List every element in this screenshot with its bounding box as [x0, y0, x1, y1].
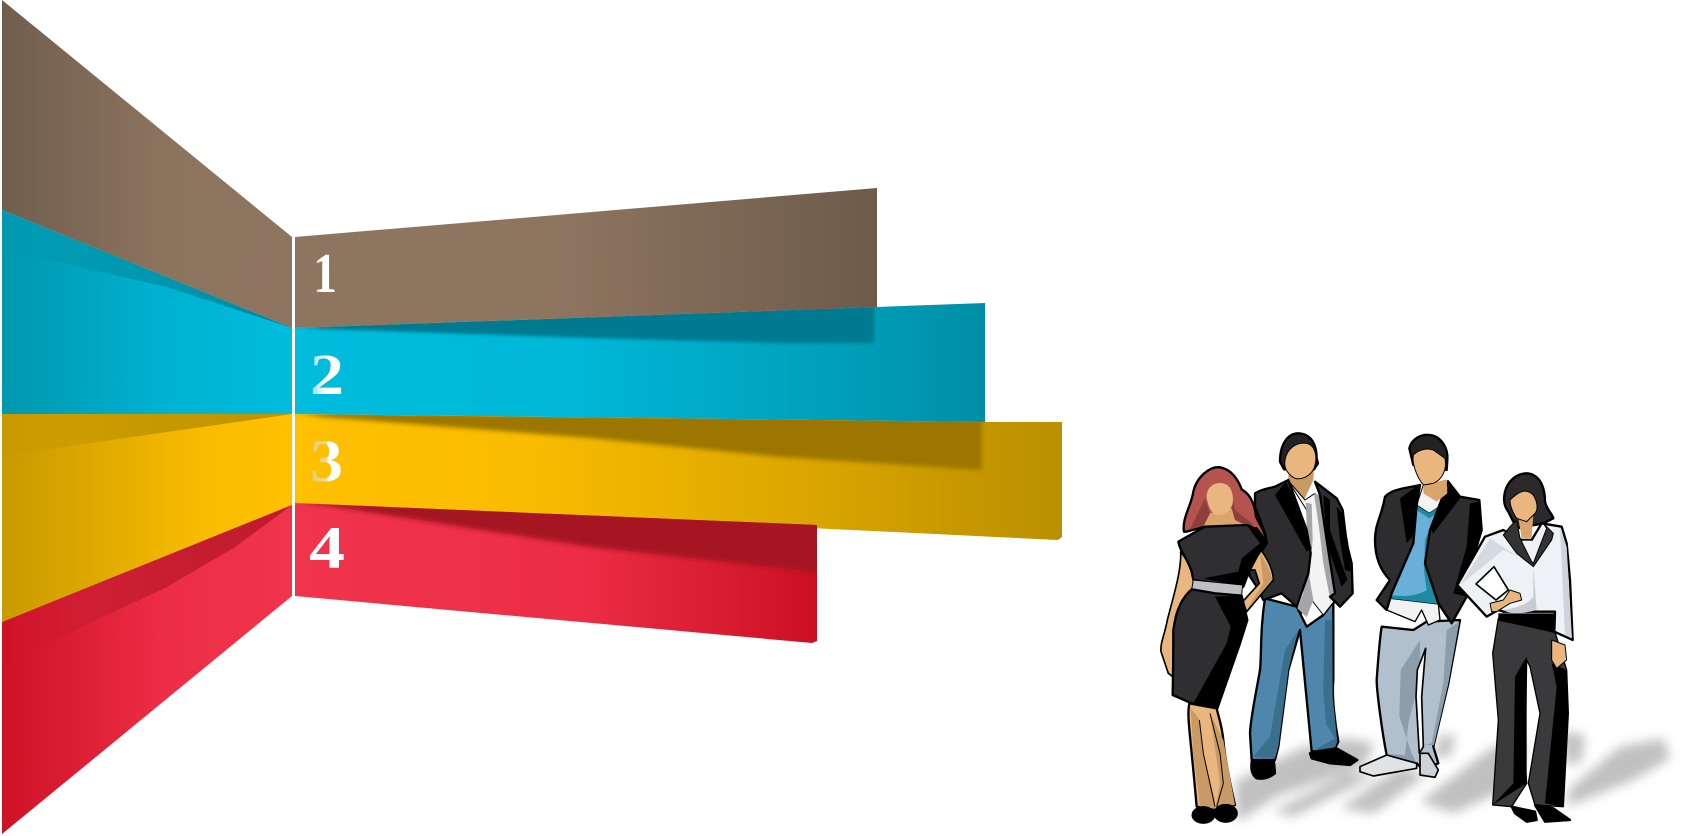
collar — [1417, 481, 1448, 513]
ribbon 3 shadow — [295, 412, 982, 470]
panel: left wall ribbons — [2, 0, 292, 834]
shirt — [1288, 480, 1335, 615]
sweater — [1390, 505, 1442, 603]
skirt — [1173, 589, 1247, 708]
tie and shirt stripes — [1297, 503, 1313, 617]
hand on hip — [1490, 590, 1522, 612]
jacket right — [1425, 482, 1482, 623]
ground shadows — [1235, 732, 1670, 822]
neck and face — [1518, 515, 1533, 538]
jacket left — [1248, 480, 1311, 607]
ribbon 4 shadow — [295, 500, 825, 574]
shoes — [1193, 807, 1214, 823]
left wall: red band — [2, 505, 292, 834]
divider: white fold line — [292, 236, 295, 597]
person: man in blue jeans — [1248, 433, 1357, 779]
hair — [1504, 473, 1553, 528]
left wall: brown band — [2, 0, 292, 328]
head — [1409, 435, 1447, 470]
lapels — [1503, 520, 1553, 567]
number 2: 2 — [310, 342, 344, 407]
hair — [1184, 467, 1267, 542]
shoes — [1251, 760, 1275, 779]
jacket — [1457, 523, 1573, 640]
ribbon 4: red — [295, 503, 817, 643]
number 4: 4 — [309, 515, 345, 581]
shirt hem — [1387, 598, 1440, 625]
dress bodice — [1178, 525, 1266, 587]
jeans — [1250, 598, 1338, 760]
person: woman in white jacket — [1457, 473, 1573, 822]
left wall: teal band — [2, 210, 292, 414]
neck and face — [1203, 508, 1248, 527]
number 3: 3 — [310, 428, 343, 494]
left wall: yellow fold shadow — [2, 414, 292, 456]
left wall: red fold shadow — [2, 505, 292, 670]
number 1: 1 — [313, 243, 337, 305]
elbow gap — [1476, 567, 1508, 600]
jacket left — [1375, 485, 1420, 610]
person: man in blue sweater — [1360, 435, 1482, 777]
left arm — [1161, 552, 1194, 678]
left wall: yellow band — [2, 414, 292, 622]
illustration: business people — [1161, 433, 1670, 823]
right hand — [1552, 640, 1567, 668]
ribbon 3: yellow — [295, 414, 1062, 540]
shoes — [1360, 755, 1417, 776]
shoes — [1512, 807, 1537, 822]
person: woman in black dress — [1161, 467, 1273, 823]
right arm — [1243, 548, 1273, 612]
panel: right ribbons — [295, 188, 1062, 643]
legs — [1188, 703, 1235, 810]
ribbon 2 shadow — [302, 307, 875, 344]
neck — [1288, 470, 1314, 502]
ribbon 2: teal — [295, 303, 985, 422]
jacket right — [1315, 482, 1353, 607]
ribbon 1: brown — [295, 188, 877, 328]
belt — [1192, 580, 1243, 595]
head — [1280, 433, 1318, 469]
trousers — [1377, 620, 1460, 770]
left wall: teal fold shadow — [2, 210, 292, 328]
black trousers — [1493, 618, 1568, 807]
